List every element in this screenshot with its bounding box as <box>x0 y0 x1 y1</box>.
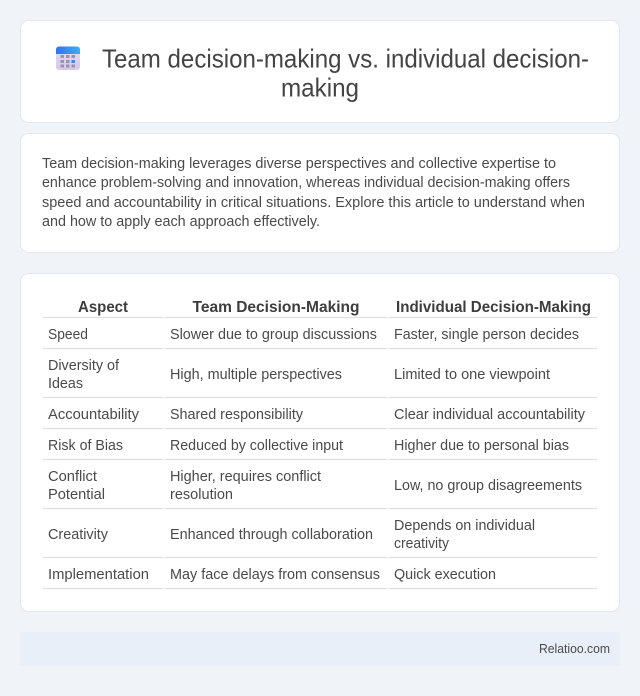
row: speed: Slower due to group discussions <box>170 327 377 343</box>
row: implementation: May face delays from consensus <box>170 567 380 583</box>
intro text: Team decision-making leverages diverse perspectives and collective expertise to <box>42 156 556 172</box>
row: implementation: Quick execution <box>394 567 496 583</box>
table header: Aspect <box>78 299 129 316</box>
row: accountability: Shared responsibility <box>170 407 304 423</box>
panel: header <box>20 20 620 122</box>
table header <box>78 299 591 316</box>
row: creativity: Creativity <box>48 527 109 543</box>
row: conflict potential: Potential <box>48 487 105 503</box>
title <box>102 46 589 102</box>
row: creativity: Enhanced through collaboration <box>170 527 373 543</box>
row: accountability: Clear individual accountability <box>394 407 586 423</box>
table header: Individual Decision-Making <box>396 299 591 316</box>
row: diversity of ideas: Limited to one viewpoint <box>394 367 550 383</box>
title: Team decision-making vs. individual decision- <box>102 46 589 74</box>
row: creativity <box>48 518 535 552</box>
footer <box>20 632 620 666</box>
footer brand text: Relatioo.com <box>539 641 610 656</box>
table header: Team Decision-Making <box>192 299 360 316</box>
intro text: speed and accountability in critical situations. Explore this article to understand when <box>42 195 585 211</box>
intro text: enhance problem-solving and innovation, whereas individual decision-making offers <box>42 175 570 191</box>
intro text <box>42 156 585 230</box>
row: risk of bias: Reduced by collective input <box>170 438 343 454</box>
row: diversity of ideas: Ideas <box>48 376 83 392</box>
row: conflict potential: Low, no group disagreements <box>394 478 582 494</box>
row: risk of bias: Higher due to personal bias <box>394 438 569 454</box>
row: speed: Faster, single person decides <box>394 327 579 343</box>
title: making <box>281 74 359 102</box>
row: risk of bias: Risk of Bias <box>48 438 123 454</box>
row: implementation: Implementation <box>48 567 149 583</box>
row: accountability: Accountability <box>48 407 140 423</box>
intro text: and how to apply each approach effectively. <box>42 214 320 230</box>
row: conflict potential: resolution <box>170 487 233 503</box>
row: conflict potential: Higher, requires conflict <box>170 469 321 485</box>
panel: introduction <box>20 134 620 252</box>
panel: comparison table <box>20 274 620 612</box>
row: implementation <box>48 567 496 583</box>
row: diversity of ideas: High, multiple perspectives <box>170 367 342 383</box>
row: creativity: creativity <box>394 536 450 552</box>
row: diversity of ideas: Diversity of <box>48 358 120 374</box>
row: risk of bias <box>48 438 569 454</box>
row: speed: Speed <box>48 327 88 343</box>
row: accountability <box>48 407 586 423</box>
row: conflict potential <box>48 469 582 503</box>
row: diversity of ideas <box>48 358 550 392</box>
row: speed <box>48 327 579 343</box>
row: conflict potential: Conflict <box>48 469 97 485</box>
icon: calendar <box>56 46 80 70</box>
row: creativity: Depends on individual <box>394 518 535 534</box>
